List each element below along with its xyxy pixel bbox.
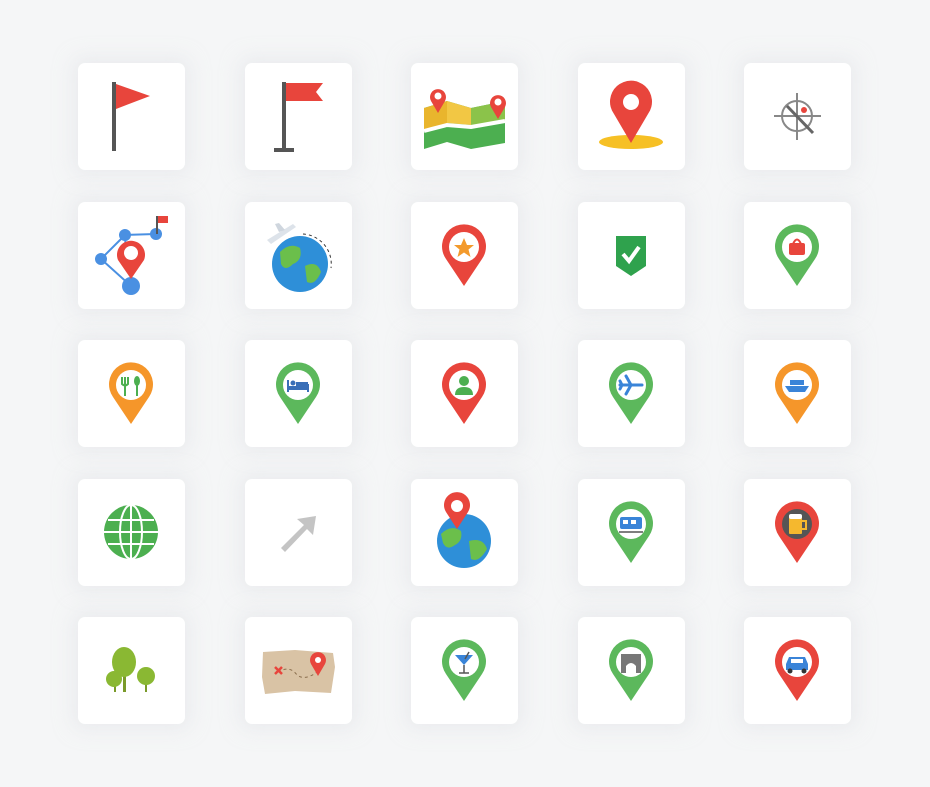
card: red flag [78, 63, 185, 170]
card: arrow [245, 479, 352, 586]
card: arch pin [578, 617, 685, 724]
card: earth with pin [411, 479, 518, 586]
card: shield check [578, 202, 685, 309]
card: globe with plane [245, 202, 352, 309]
card: crosshair [744, 63, 851, 170]
card: car pin [744, 617, 851, 724]
card: grid globe [78, 479, 185, 586]
card: restaurant pin [78, 340, 185, 447]
card: trees [78, 617, 185, 724]
card: folded map [411, 63, 518, 170]
card: cocktail pin [411, 617, 518, 724]
card: star pin [411, 202, 518, 309]
card: hotel pin [245, 340, 352, 447]
card: airport pin [578, 340, 685, 447]
card: route network [78, 202, 185, 309]
card: pin on spot [578, 63, 685, 170]
card: ship pin [744, 340, 851, 447]
card: beer pin [744, 479, 851, 586]
card: train pin [578, 479, 685, 586]
card: treasure map [245, 617, 352, 724]
card: shopping pin [744, 202, 851, 309]
card: person pin [411, 340, 518, 447]
card: waving flag [245, 63, 352, 170]
